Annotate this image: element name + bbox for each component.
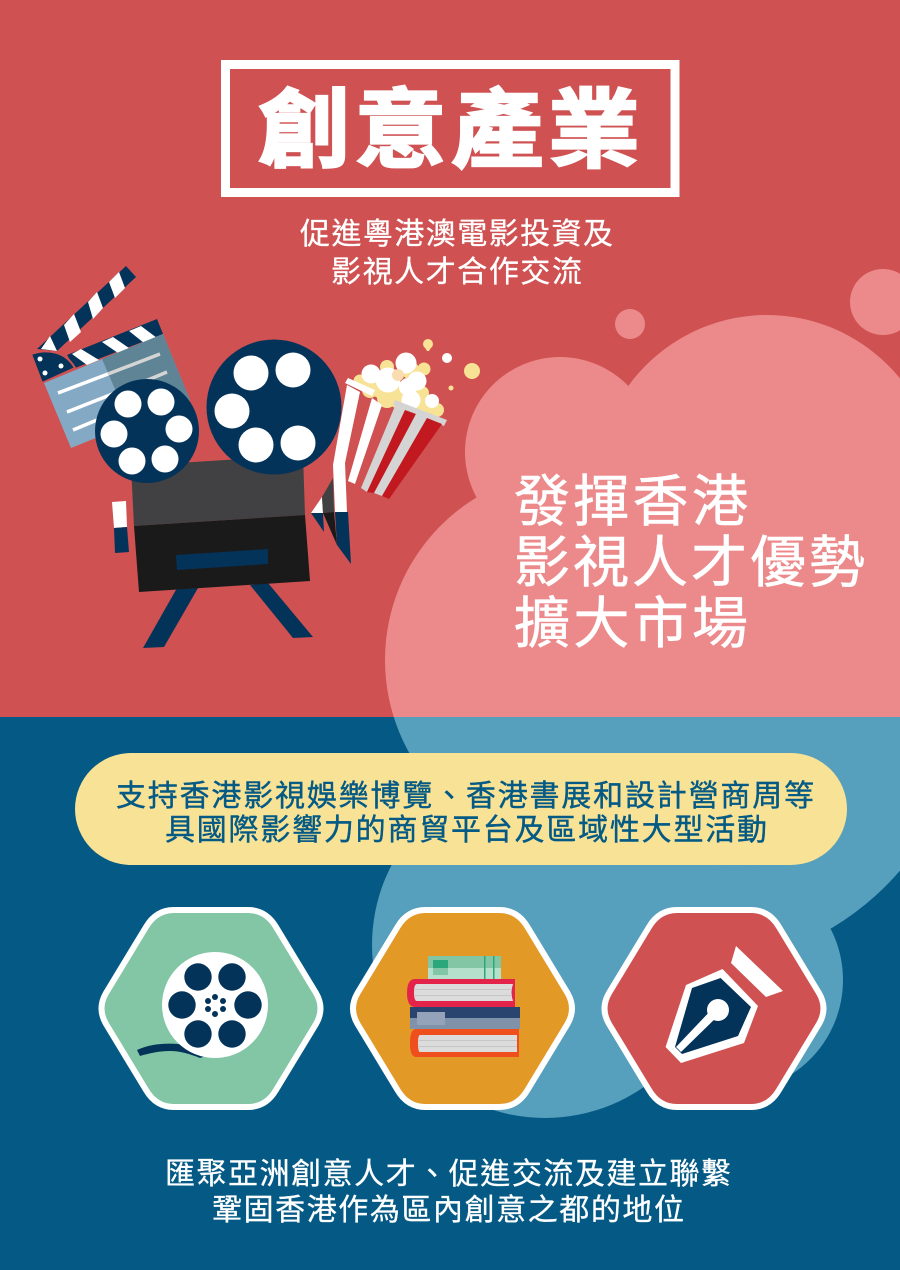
cloud: pink upper part bbox=[385, 315, 900, 717]
cloud headline: 影視人才優勢 bbox=[514, 531, 865, 594]
closing text: 匯聚亞洲創意人才、促進交流及建立聯繫 bbox=[165, 1158, 731, 1191]
subtitle bbox=[300, 218, 613, 289]
closing text: 鞏固香港作為區內創意之都的地位 bbox=[212, 1194, 684, 1227]
decorative bubble large bbox=[850, 269, 900, 335]
panel: blue lower background bbox=[0, 717, 900, 1270]
title frame bbox=[226, 64, 675, 192]
hexagon: books bbox=[353, 910, 572, 1107]
icon: clapperboard bbox=[31, 266, 190, 448]
callout pill bbox=[75, 753, 847, 865]
panel: red upper background bbox=[0, 0, 900, 717]
cloud headline bbox=[514, 470, 865, 655]
decorative bubble small bbox=[615, 309, 645, 339]
icon: pen nib bbox=[666, 946, 783, 1063]
cloud headline: 發揮香港 bbox=[514, 470, 748, 533]
cloud headline: 擴大市場 bbox=[514, 592, 748, 655]
cloud: blue lower part bbox=[372, 717, 900, 1118]
callout pill: 支持香港影視娛樂博覽、香港書展和設計營商周等 bbox=[116, 780, 814, 813]
title: 創意產業 bbox=[258, 83, 640, 178]
subtitle: 促進粵港澳電影投資及 bbox=[300, 218, 613, 251]
icon: popcorn bbox=[333, 339, 480, 512]
callout pill: 具國際影響力的商貿平台及區域性大型活動 bbox=[165, 814, 767, 847]
icon: film tail bbox=[137, 1044, 206, 1058]
hexagon: fountain pen bbox=[604, 910, 824, 1107]
icon: reel bbox=[162, 952, 268, 1058]
closing text bbox=[165, 1158, 731, 1227]
icon: stack of books bbox=[407, 956, 520, 1057]
hexagon: film reel bbox=[102, 910, 320, 1107]
icon: film projector bbox=[95, 340, 351, 648]
subtitle: 影視人才合作交流 bbox=[331, 256, 582, 289]
